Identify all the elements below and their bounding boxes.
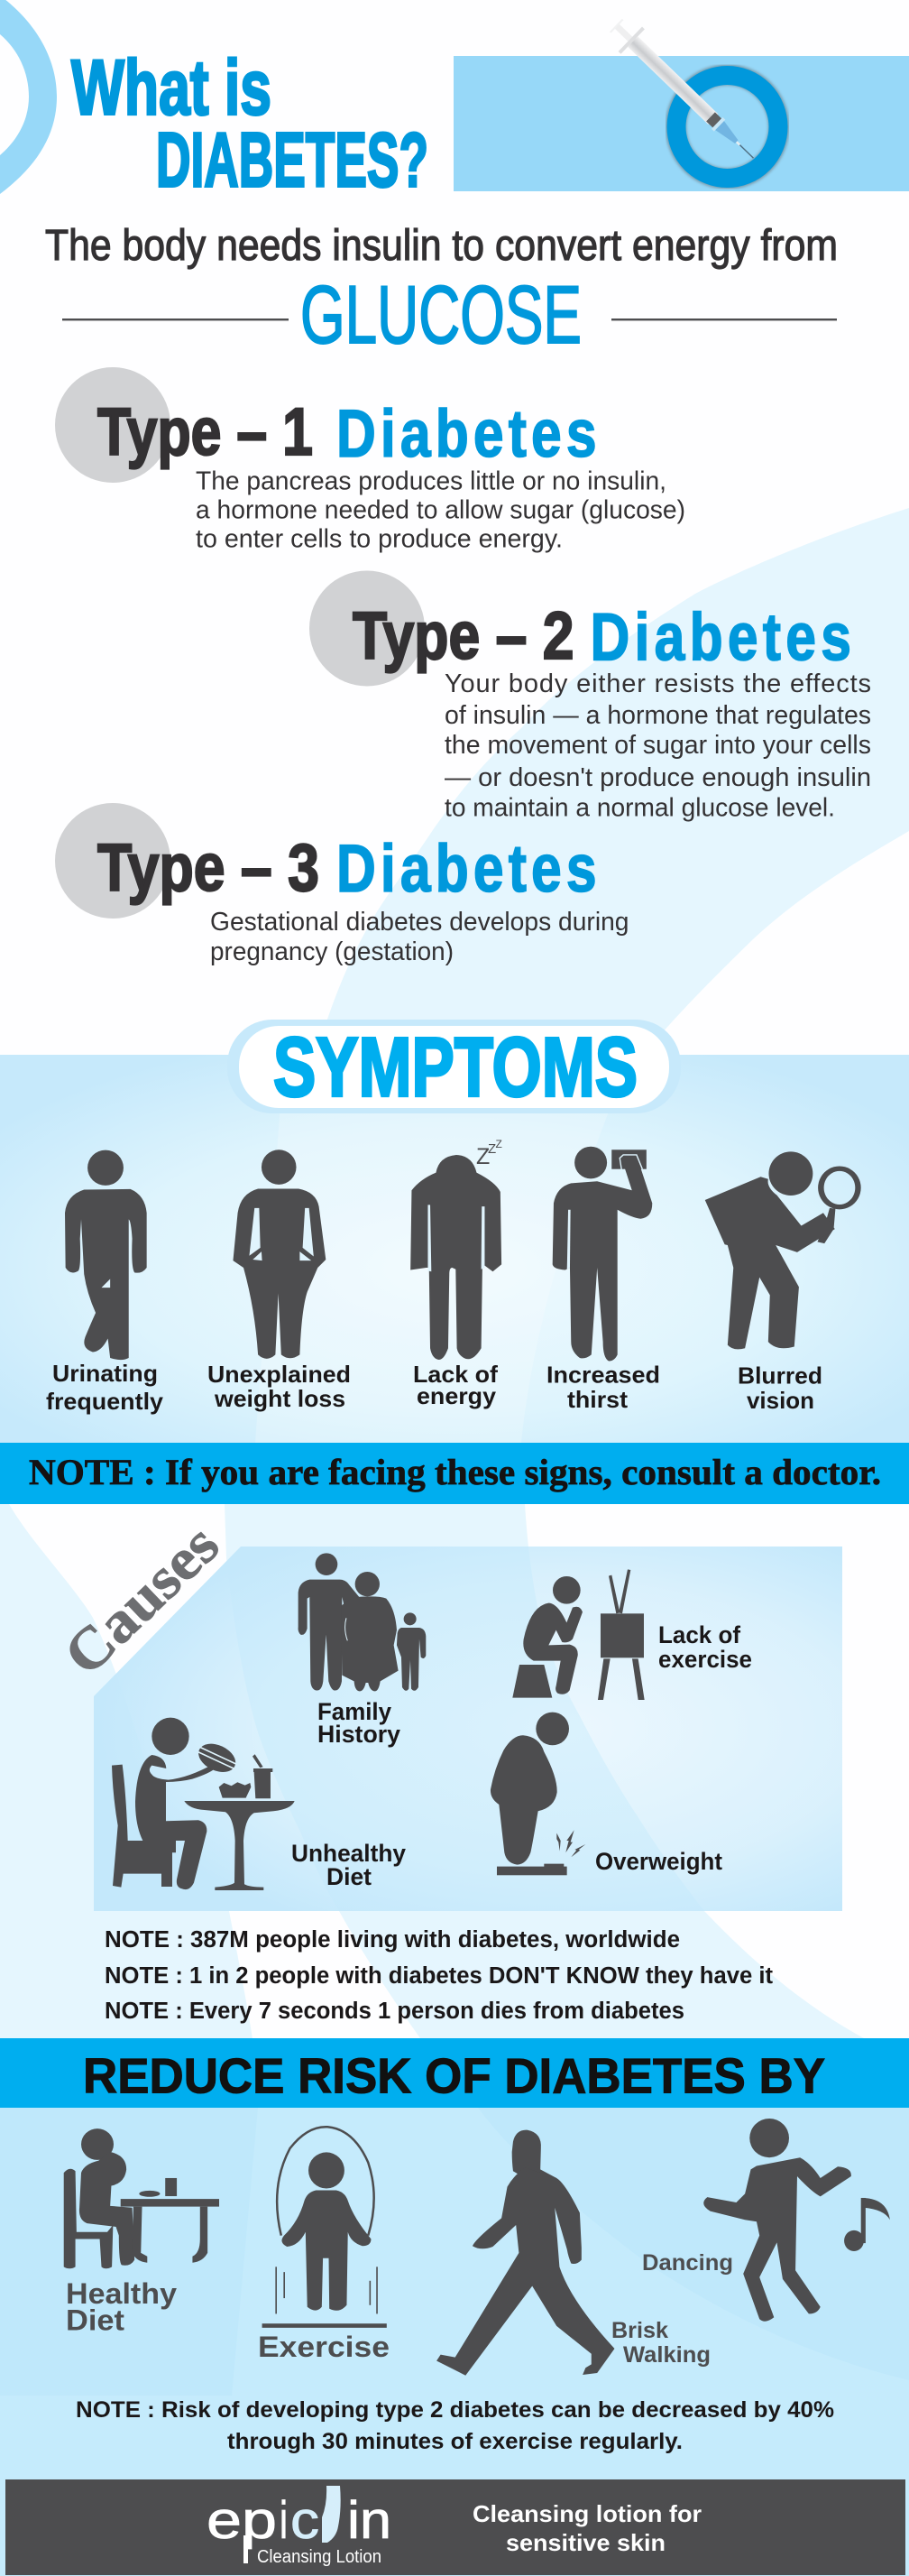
label: lack of energy (413, 1361, 498, 1409)
icon: healthy diet, person at table (64, 2128, 219, 2268)
note band: consult a doctor: NOTE : If you are facing these signs, consult a doctor. (29, 1452, 881, 1492)
icon: weight loss figure (233, 1150, 326, 1359)
label: lack of exercise: exercise (658, 1646, 752, 1673)
icon: family history (298, 1553, 426, 1691)
panel: type 1: a hormone needed to allow sugar (glucose) (196, 496, 685, 525)
background wedge: white (9, 1504, 420, 2038)
label: dancing: Dancing (642, 2250, 733, 2276)
panel: type 1 (55, 367, 685, 554)
panel: type 2: Your body either resists the effects (445, 669, 871, 698)
logo: epiclin cleansing lotion: in (347, 2491, 391, 2550)
icon: sleep letters: Z (496, 1138, 502, 1150)
footer bar (5, 2479, 905, 2575)
note: exercise reduces risk: NOTE : Risk of developing type 2 diabetes can be decreased by 40% (76, 2397, 834, 2423)
label: blurred vision: vision (747, 1387, 814, 1414)
label: unhealthy diet (291, 1840, 406, 1890)
label: blurred vision (738, 1362, 822, 1414)
header: left ring decoration (0, 0, 57, 194)
note band: consult a doctor (0, 1443, 909, 1504)
panel: type 2 (309, 570, 871, 823)
footer tagline (473, 2500, 702, 2556)
icon: sleep letters: Z (488, 1141, 496, 1157)
title (71, 45, 428, 204)
panel: type 3: Gestational diabetes develops during (210, 908, 629, 937)
panel: type 2: of insulin — a hormone that regulates (445, 701, 871, 730)
panel: type 2: to maintain a normal glucose level. (445, 794, 835, 823)
icon: lack of exercise, person watching tv (512, 1569, 645, 1700)
label: brisk walking: Walking (623, 2342, 711, 2368)
causes heading: Causes (52, 1512, 232, 1688)
logo: epiclin cleansing lotion: i (280, 2491, 288, 2550)
panel: type 3: Type – 3 (97, 830, 319, 905)
label: unexplained weight loss (207, 1361, 351, 1412)
panel: type 1: Diabetes (336, 397, 597, 471)
panel: type 2: the movement of sugar into your cells (445, 731, 871, 760)
label: increased thirst: Increased (546, 1361, 660, 1388)
footer tagline: sensitive skin (506, 2529, 666, 2556)
icon: sleep letters (476, 1138, 502, 1169)
icon: blue diabetes ring (676, 75, 779, 179)
label: urinating frequently: frequently (46, 1388, 164, 1415)
icon: syringe (604, 13, 766, 171)
panel: type 1: Type – 1 (97, 394, 313, 469)
label: lack of energy: energy (417, 1382, 497, 1409)
label: healthy diet (66, 2277, 177, 2337)
reduce risk heading band (0, 2038, 909, 2108)
icon: unhealthy diet, person eating (112, 1718, 295, 1890)
notes: diabetes statistics: NOTE : 1 in 2 people with diabetes DON'T KNOW they have it (105, 1963, 773, 1989)
logo: epiclin cleansing lotion (207, 2486, 391, 2567)
icon: exercise, skipping rope (262, 2127, 387, 2328)
label: exercise: Exercise (258, 2331, 390, 2363)
notes: diabetes statistics (105, 1927, 773, 2024)
label: blurred vision: Blurred (738, 1362, 822, 1390)
label: brisk walking: Brisk (611, 2318, 668, 2343)
icon: sleep letters: Z (476, 1144, 490, 1169)
header blue panel (454, 56, 909, 191)
footer tagline: Cleansing lotion for (473, 2500, 702, 2527)
panel: type 2: Diabetes (590, 601, 851, 675)
background swoosh: upper (316, 508, 909, 1055)
reduce risk heading band: REDUCE RISK OF DIABETES BY (83, 2048, 825, 2104)
notes: diabetes statistics: NOTE : 387M people living with diabetes, worldwide (105, 1927, 680, 1953)
intro sentence: The body needs insulin to convert energy from (45, 222, 838, 270)
label: unhealthy diet: Unhealthy (291, 1840, 406, 1867)
label: healthy diet: Healthy (66, 2277, 177, 2310)
label: brisk walking (611, 2318, 711, 2368)
icon: dancing figure with music note (703, 2119, 890, 2322)
label: healthy diet: Diet (66, 2304, 124, 2337)
label: unexplained weight loss: Unexplained (207, 1361, 351, 1388)
notes: diabetes statistics: NOTE : Every 7 seconds 1 person dies from diabetes (105, 1999, 684, 2024)
label: overweight: Overweight (595, 1848, 722, 1875)
icon: blurred vision figure (705, 1151, 861, 1349)
panel: type 3: pregnancy (gestation) (210, 937, 454, 966)
icon: urinating figure (65, 1150, 147, 1360)
panel: causes (94, 1547, 842, 1911)
title: What is (71, 45, 271, 132)
note: exercise reduces risk: through 30 minutes of exercise regularly. (227, 2429, 683, 2454)
label: lack of exercise (658, 1621, 752, 1673)
icon: overweight person on scale (491, 1713, 585, 1875)
panel: type 1: to enter cells to produce energy. (196, 525, 563, 554)
label: increased thirst (546, 1361, 660, 1413)
title: DIABETES? (156, 117, 428, 204)
label: lack of exercise: Lack of (658, 1621, 741, 1648)
glucose heading with rules: GLUCOSE (300, 270, 582, 361)
panel: symptoms band (0, 1055, 909, 1443)
label: urinating frequently: Urinating (52, 1360, 158, 1387)
icon: increased thirst figure (553, 1147, 652, 1362)
label: lack of energy: Lack of (413, 1361, 498, 1388)
icon: brisk walking figure (436, 2130, 614, 2376)
logo: epiclin cleansing lotion: c (290, 2491, 319, 2550)
label: unexplained weight loss: weight loss (214, 1385, 345, 1412)
label: unhealthy diet: Diet (326, 1863, 372, 1890)
label: urinating frequently (46, 1360, 164, 1415)
label: family history: History (317, 1721, 400, 1748)
background swoosh: lower left and middle (0, 1504, 864, 2038)
panel: type 3: Diabetes (336, 832, 597, 906)
panel: type 2: — or doesn't produce enough insulin (445, 763, 871, 792)
logo: epiclin cleansing lotion: Cleansing Lotion (257, 2547, 381, 2567)
panel: type 1: The pancreas produces little or no insulin, (196, 467, 666, 496)
panel: reduce risk background (0, 2108, 909, 2576)
logo: epiclin cleansing lotion: ep (207, 2491, 277, 2550)
panel: type 2: Type – 2 (353, 598, 574, 673)
symptoms heading pill: SYMPTOMS (273, 1020, 638, 1113)
panel: type 3 (55, 803, 629, 966)
note: exercise reduces risk (76, 2397, 834, 2454)
label: family history (317, 1698, 400, 1748)
label: family history: Family (317, 1698, 391, 1725)
icon: lack of energy figure (410, 1155, 501, 1360)
label: increased thirst: thirst (567, 1386, 628, 1413)
